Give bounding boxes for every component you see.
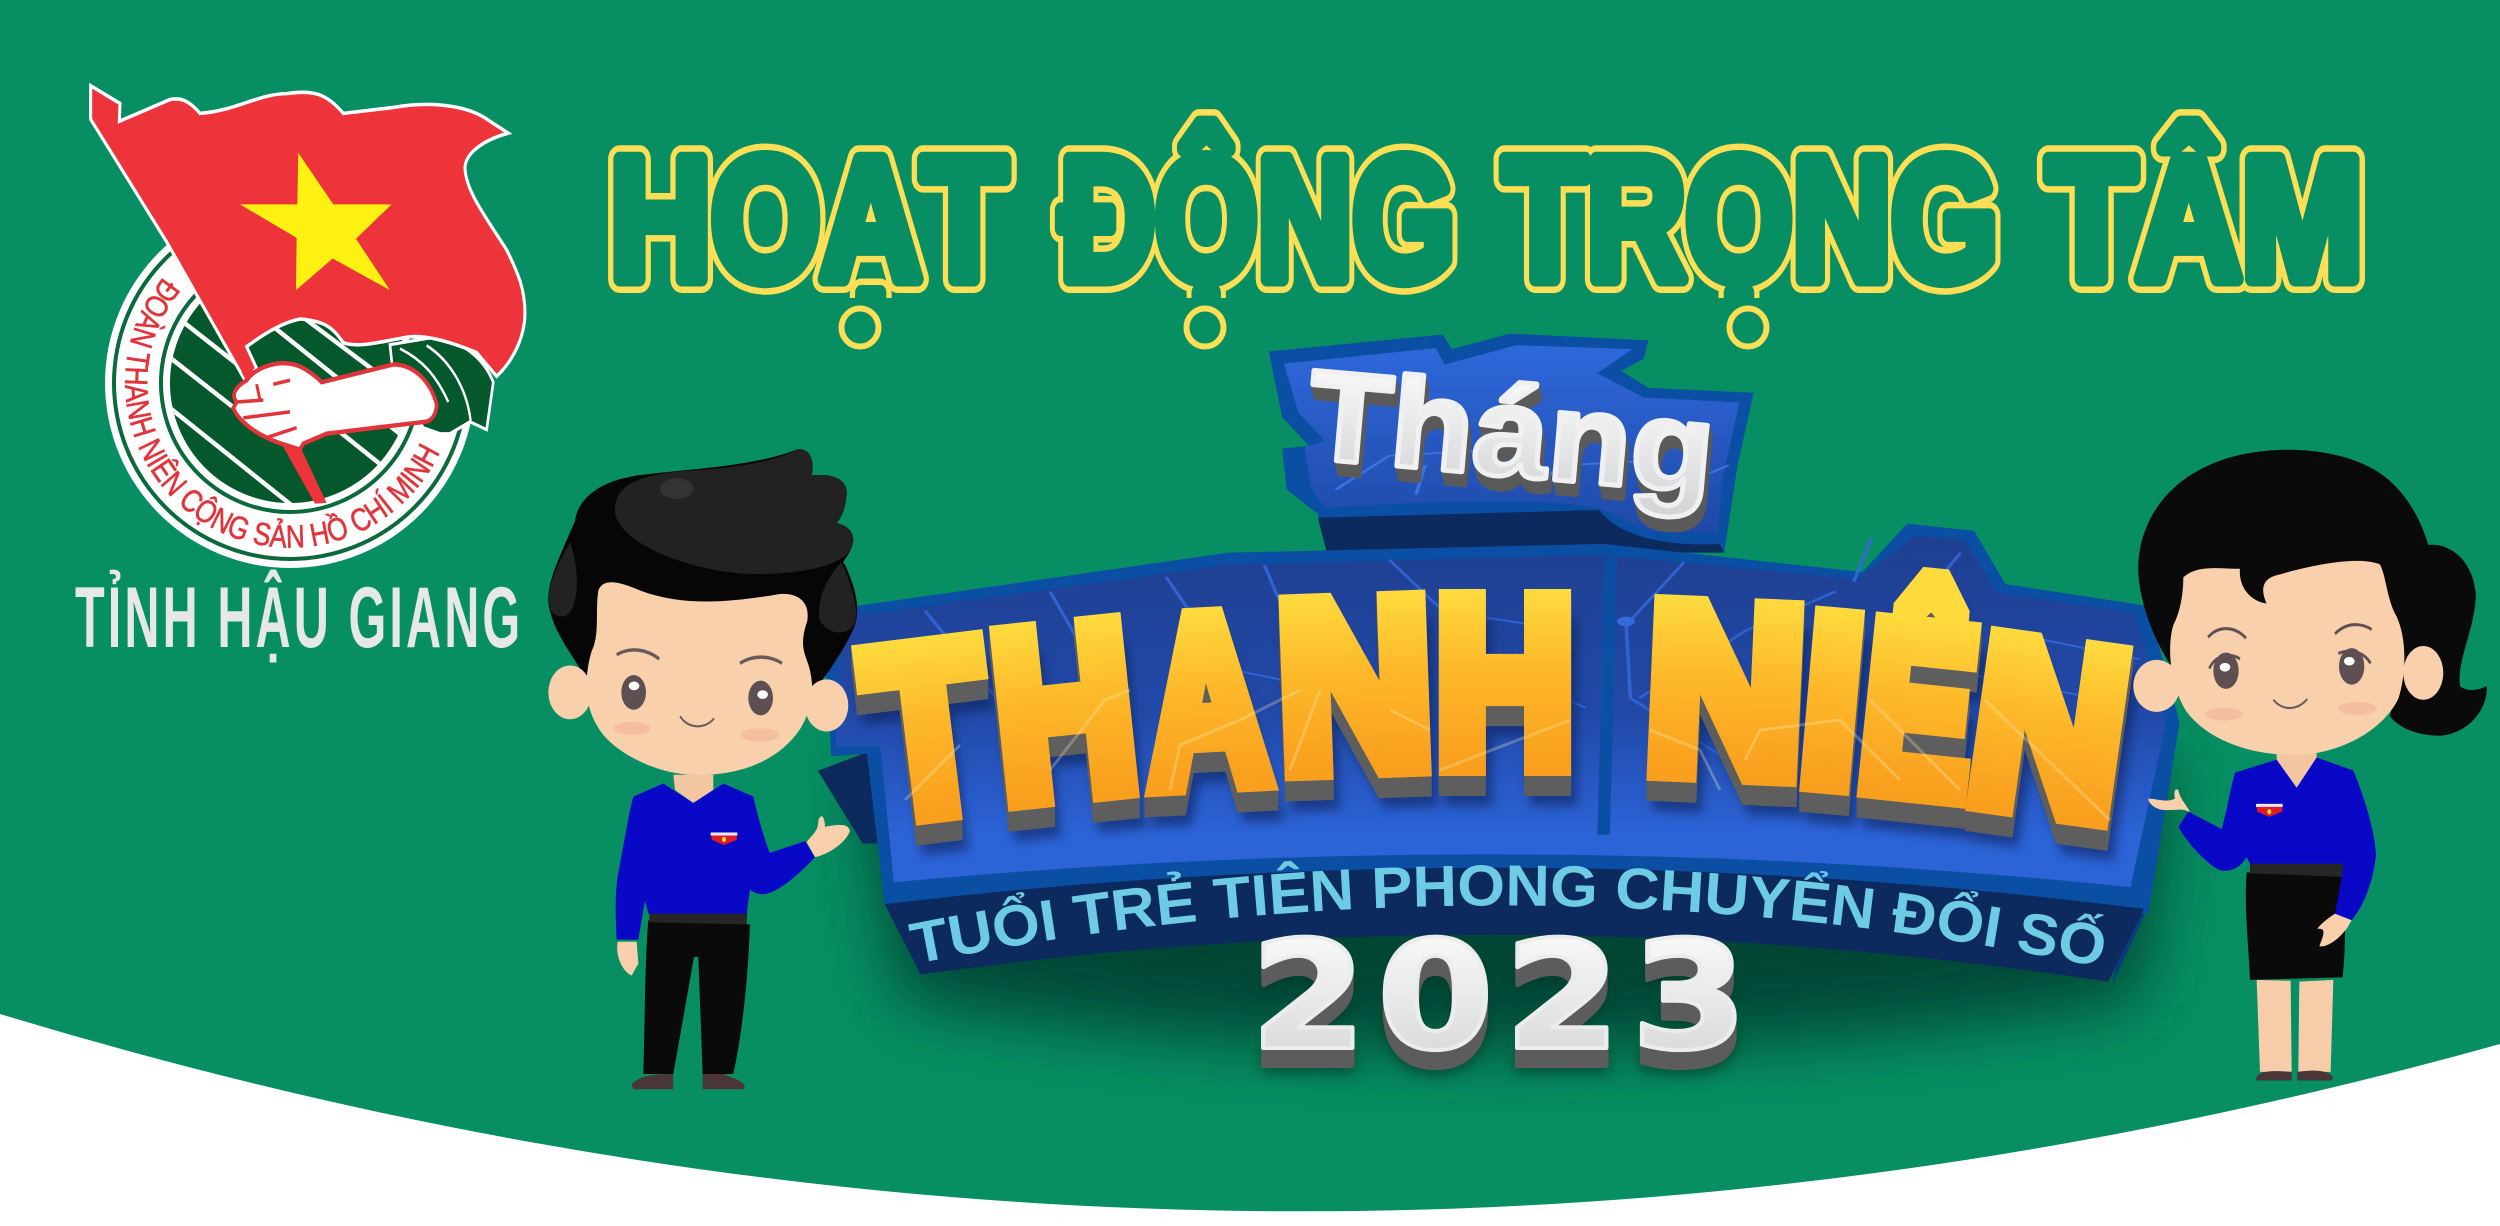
title: HOẠT ĐỘNG TRỌNG TÂM: HOẠT	[610, 121, 1007, 316]
title: HOẠT ĐỘNG TRỌNG TÂM: ĐỘNG	[1060, 121, 1455, 316]
plaque side wedges	[818, 751, 880, 843]
woman belt	[2250, 860, 2343, 877]
title: HOẠT ĐỘNG TRỌNG TÂM: TRỌNG	[1503, 121, 1998, 316]
title: HOẠT ĐỘNG TRỌNG TÂM: TÂM	[2047, 121, 2363, 316]
character: young woman in blue shirt	[2133, 450, 2487, 1081]
woman blue shirt	[2178, 757, 2376, 920]
man hair highlights	[548, 449, 856, 632]
man face	[587, 582, 812, 775]
emblem badge circle: ĐOÀN THANH NIÊN CỘNG SẢN HỒ CHÍ MINH	[124, 278, 440, 548]
word: THANH NIEN: N	[1956, 587, 2142, 870]
word: THANH NIEN: A	[1140, 566, 1273, 836]
word: THANH NIEN: T	[854, 591, 1002, 868]
banner drop shadow	[860, 760, 2170, 1050]
man neck	[673, 775, 713, 803]
word: THANH NIEN: H	[1436, 550, 1574, 815]
man shoes	[632, 1074, 745, 1089]
navy tagline ribbon	[885, 868, 2144, 982]
woman facial features	[2205, 625, 2377, 721]
tagline on arc: TUỔI TRẺ TIÊN PHONG CHUYỂN ĐỔI SỐ	[908, 860, 2104, 964]
word: THANH NIEN: N	[1641, 555, 1810, 826]
woman badge	[2256, 804, 2283, 817]
woman hair	[2138, 450, 2487, 736]
province name: TỈNH HẬU GIANG	[75, 568, 523, 665]
man hands	[617, 816, 850, 976]
title: HOẠT ĐỘNG TRỌNG TÂM: TÂM	[2047, 121, 2363, 316]
word: THANH NIEN: Ê	[1850, 573, 1987, 847]
title: HOẠT ĐỘNG TRỌNG TÂM	[610, 121, 2363, 346]
plaque lower ledge	[885, 857, 2144, 911]
man badge	[711, 832, 737, 845]
woman ears	[2133, 646, 2443, 712]
man facial features	[613, 650, 782, 741]
word: Thang: Tháng	[1303, 343, 1720, 521]
circuit traces	[854, 538, 2139, 766]
plaque center divider	[1604, 558, 1611, 835]
woman skirt	[2246, 872, 2345, 980]
man ears	[548, 665, 848, 731]
faint circuit lines over letters	[905, 690, 2110, 820]
title: HOẠT ĐỘNG TRỌNG TÂM: TRỌNG	[1503, 121, 1998, 316]
woman shoes	[2256, 1071, 2333, 1081]
man belt	[649, 911, 747, 924]
woman face	[2170, 561, 2404, 755]
banner: Thanh Nien plaque	[818, 524, 2180, 984]
woman legs	[2257, 980, 2333, 1072]
woman neck	[2277, 753, 2317, 788]
word: 2023: 2023	[1250, 909, 1758, 1084]
man blue shirt	[616, 783, 815, 940]
title: HOẠT ĐỘNG TRỌNG TÂM: ĐỘNG	[1060, 121, 1455, 316]
banner: Thang plaque	[1269, 334, 1754, 553]
emblem flag, pole, sleeve and fist	[91, 86, 525, 504]
man hair	[548, 449, 857, 690]
word: THANH NIEN	[854, 550, 2142, 870]
plaque border	[822, 524, 2180, 914]
word: THANH NIEN: N	[1274, 550, 1437, 820]
word: THANH NIEN: I	[1792, 566, 1872, 835]
man trousers	[643, 920, 750, 1074]
title: HOẠT ĐỘNG TRỌNG TÂM: HOẠT	[610, 121, 1007, 316]
emblem star	[240, 153, 392, 290]
character: young man in blue shirt	[548, 449, 857, 1089]
logo: Doan Thanh nien emblem	[89, 82, 526, 568]
woman hands	[2148, 789, 2352, 946]
word: THANH NIEN: H	[982, 573, 1147, 851]
plaque inner panel	[836, 536, 2166, 887]
